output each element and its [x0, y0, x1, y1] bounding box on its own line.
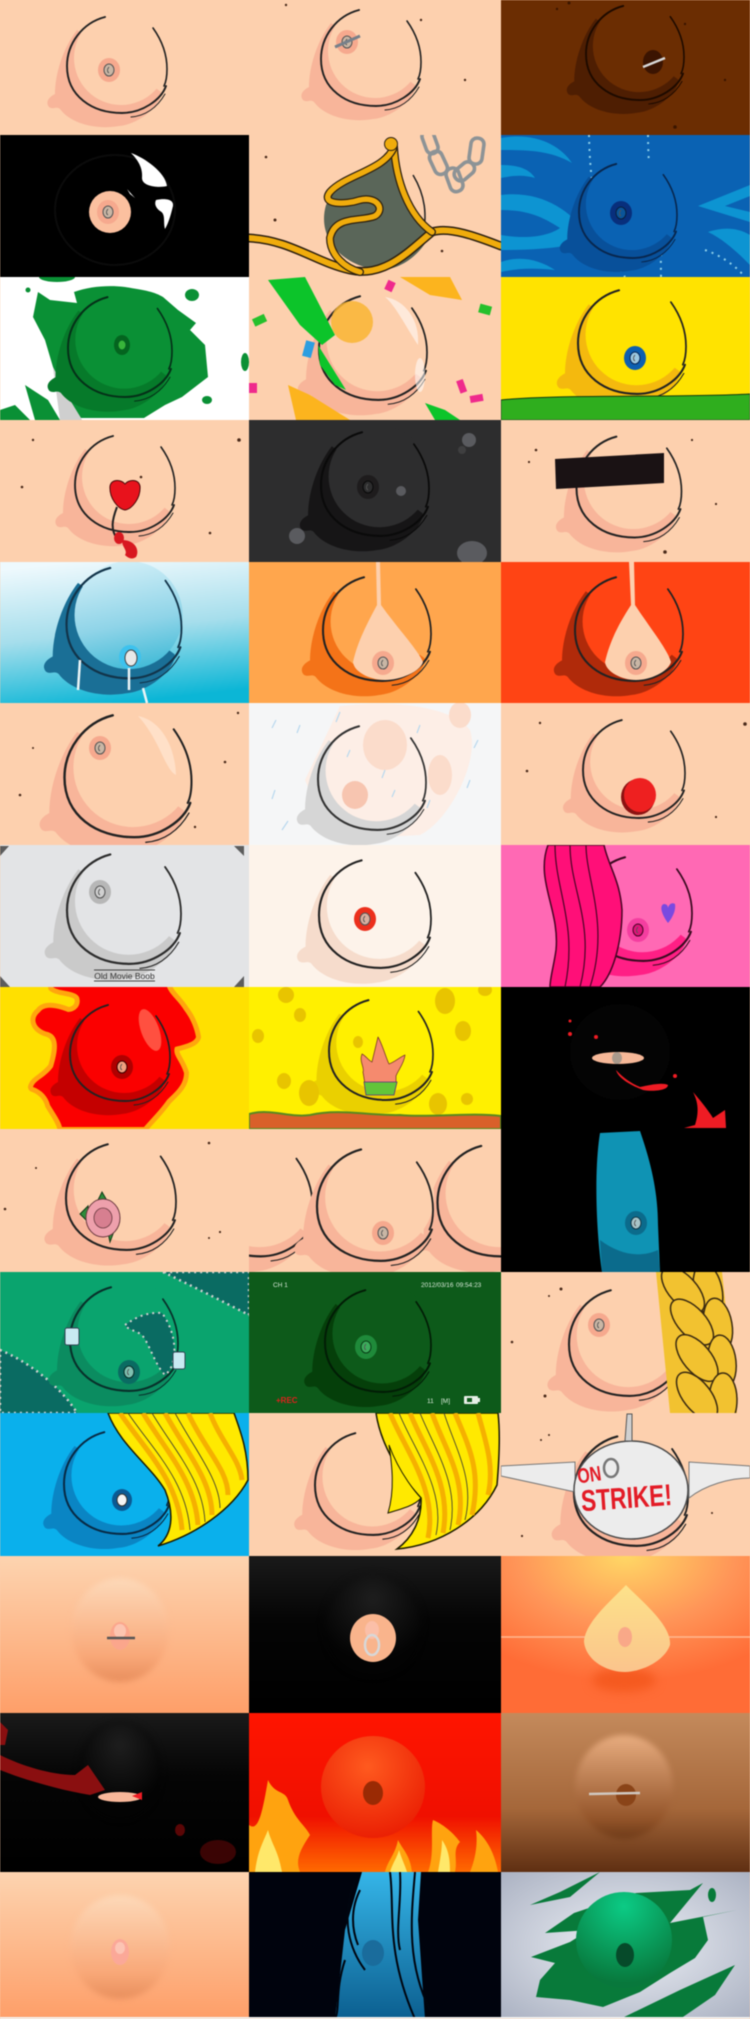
panel: torn green on paper [501, 1872, 750, 2019]
figure [294, 1427, 422, 1550]
figure [48, 291, 173, 412]
detail [616, 1943, 634, 1967]
panel: black with blue band [500, 1128, 750, 1273]
cord with charm [113, 507, 137, 558]
flame pattern [501, 137, 750, 272]
light beam [605, 562, 671, 680]
camera overlay: +REC [276, 1396, 298, 1405]
detail [625, 651, 647, 675]
strike lettering: STRIKE! [580, 1479, 673, 1518]
chain [420, 129, 485, 193]
dark detail [357, 475, 379, 499]
starfish character [361, 1037, 405, 1095]
rose tattoo [80, 1192, 120, 1242]
center figure [294, 1143, 434, 1277]
panel: soft peach with bar [0, 1578, 250, 1714]
blue band [596, 1131, 660, 1272]
detail [89, 736, 111, 760]
dark form [78, 1720, 162, 1820]
panel: cream [248, 844, 502, 988]
washed shape [305, 704, 472, 840]
panel: night vision [248, 1271, 502, 1414]
detail [98, 58, 120, 82]
figure [563, 714, 686, 832]
braid [654, 1260, 739, 1427]
figure [556, 430, 683, 552]
specks [4, 1142, 221, 1239]
green splats [0, 272, 249, 420]
caption: Old Movie Boob [94, 971, 155, 981]
detail [114, 335, 130, 355]
blonde hair [376, 1413, 499, 1549]
specks [521, 1434, 713, 1537]
drop form [584, 1585, 670, 1672]
stitched patch [125, 1313, 174, 1375]
battery [464, 1396, 480, 1404]
blue body [335, 1872, 425, 2019]
grey shape [324, 150, 432, 270]
flame core [255, 1830, 450, 1872]
panel: black with wet hair [249, 1872, 501, 2019]
left figure [175, 1139, 314, 1273]
figure [304, 1284, 432, 1407]
teal patches [0, 1272, 249, 1413]
detail [589, 1784, 640, 1806]
outline [413, 175, 425, 240]
panel: blue tribal [500, 134, 750, 278]
panel: black with ring [248, 1555, 502, 1714]
panel: black with highlights [0, 134, 250, 278]
exposed oval [89, 191, 131, 233]
panel: peach with gold band and chain [248, 134, 502, 277]
slit [98, 1792, 142, 1802]
floor line [501, 1636, 750, 1638]
figure [40, 708, 193, 855]
panel: yellow and green [500, 276, 750, 421]
panel: peach with rose [3, 1141, 222, 1266]
panel: pale washed with snow [248, 702, 502, 846]
panel: brown with bar [500, 1712, 750, 1873]
green form [576, 1892, 672, 1988]
faint outline [570, 1004, 670, 1100]
lower shade [600, 1240, 660, 1272]
panel: yellow sponge [248, 986, 502, 1130]
blood streak [0, 1722, 236, 1864]
ground [249, 1112, 501, 1129]
hook [625, 1414, 632, 1441]
highlight [138, 716, 176, 775]
panel: red with flames [248, 1712, 502, 1873]
flames [249, 1780, 498, 1872]
sponge holes [252, 984, 492, 1115]
figure [50, 999, 171, 1115]
red form [321, 1736, 425, 1838]
heart [661, 903, 675, 923]
panel: red-orange spotlight [500, 561, 750, 704]
figure [44, 561, 183, 695]
gleam [134, 1006, 166, 1054]
panel: black with blood slit [0, 1712, 250, 1873]
blood [568, 1020, 726, 1128]
figure [297, 854, 432, 984]
specks [556, 2, 726, 129]
figure [45, 848, 182, 980]
panel: brown [500, 0, 750, 136]
detail [372, 651, 394, 675]
dark form [323, 1573, 423, 1677]
detail with bar [643, 50, 665, 74]
specks [285, 4, 466, 81]
figure [554, 571, 684, 696]
detail with bar [335, 30, 360, 54]
panel: glowing orange [500, 1556, 750, 1714]
figure [560, 158, 678, 272]
detail [618, 1627, 632, 1647]
rocks [289, 433, 487, 565]
detail [111, 1055, 133, 1079]
strike lettering [576, 1462, 673, 1518]
flame [33, 987, 196, 1127]
figure [301, 4, 422, 120]
figure [47, 11, 168, 127]
flame rim [33, 987, 196, 1127]
panel: peach with bar piercing [284, 3, 467, 120]
camera overlay: 11 [427, 1398, 434, 1405]
pink hair [544, 845, 622, 987]
detail [362, 1940, 384, 1966]
figure [297, 720, 427, 845]
panel: three figures [248, 1144, 502, 1272]
soft form [575, 1735, 673, 1839]
figure [302, 571, 432, 696]
panel: icy blue [0, 562, 250, 704]
specks [19, 712, 239, 828]
strike lettering: ON [576, 1462, 603, 1488]
detail [107, 1622, 135, 1650]
detail ring [604, 1459, 618, 1477]
figure [298, 290, 428, 415]
panel: dark grey rock [248, 419, 502, 563]
green brush [268, 277, 346, 390]
figure [309, 994, 434, 1115]
camera overlay: 09:54:23 [456, 1282, 482, 1289]
figure [55, 430, 176, 546]
detail [118, 1360, 140, 1384]
light beam [353, 562, 423, 680]
red detail [354, 907, 376, 931]
detail [119, 645, 141, 669]
stains [342, 702, 471, 809]
figure [552, 1430, 689, 1562]
camera overlay: CH 1 [273, 1282, 288, 1289]
specks [526, 722, 747, 818]
panel: censor bar [527, 434, 718, 554]
camera overlay: [M] [441, 1398, 450, 1405]
glow shadow [592, 1668, 656, 1692]
panel: peach with braid [510, 1271, 738, 1414]
highlights [127, 153, 173, 229]
snow ticks [272, 712, 478, 830]
figure [49, 1281, 179, 1406]
red button [621, 778, 656, 815]
bottom edge [0, 2017, 750, 2019]
panel: red heart charm [20, 434, 242, 560]
panel: torn green on white [0, 276, 250, 421]
panel: soft peach [0, 1892, 250, 2018]
figure [547, 1284, 680, 1412]
panel: fire on yellow [0, 986, 250, 1130]
red heart [110, 480, 140, 510]
figure [563, 851, 693, 976]
panel: peach with paint and confetti [248, 276, 493, 421]
blue detail [624, 346, 646, 370]
detail [625, 1211, 647, 1235]
spotted area [331, 301, 373, 343]
detail [363, 1781, 383, 1805]
panel: old movie [0, 844, 250, 988]
white cover [574, 1441, 688, 1539]
green detail [355, 1335, 377, 1359]
grey patch [53, 367, 82, 420]
figure [300, 426, 430, 551]
green ground [501, 394, 750, 420]
soft form [71, 1578, 169, 1682]
panel: cyan with blonde hair [0, 1412, 250, 1557]
specks [511, 1288, 562, 1398]
faint outline [55, 155, 175, 265]
specks [265, 129, 443, 252]
figure [44, 1138, 177, 1266]
film corners [0, 846, 244, 987]
right figure [415, 1139, 554, 1273]
slit [592, 1052, 644, 1064]
soft form [70, 1895, 170, 1999]
green corner [425, 403, 460, 420]
detail [111, 1939, 129, 1965]
figure [557, 284, 687, 409]
panel: red button [525, 718, 748, 833]
specks [21, 438, 241, 534]
bolts [65, 1328, 185, 1369]
highlights [385, 297, 425, 392]
panel: black with blood [500, 986, 750, 1130]
hair strands [335, 1872, 430, 2019]
figure [43, 1426, 171, 1549]
blonde hair [108, 1413, 248, 1546]
detail [112, 1489, 132, 1511]
panel: peach with blonde hair [294, 1412, 501, 1551]
panel: on strike [500, 1412, 750, 1556]
censor bar [555, 453, 664, 489]
detail [588, 1313, 610, 1337]
panel: stitched green [0, 1271, 250, 1414]
panel: large peach [18, 711, 240, 846]
panel: plain peach [47, 15, 169, 128]
gold band [249, 138, 501, 272]
camera overlay: 2012/03/16 [421, 1282, 454, 1289]
panel: pink hair [500, 844, 750, 988]
camera overlay [273, 1282, 482, 1405]
specks [528, 439, 717, 554]
drips [78, 660, 147, 703]
dark detail [610, 201, 632, 225]
detail [372, 1221, 394, 1245]
orange brush [288, 277, 462, 420]
detail [627, 918, 649, 942]
confetti [249, 280, 492, 403]
grey detail [89, 880, 111, 904]
ring [365, 1621, 379, 1655]
torn green [530, 1872, 737, 2019]
bare oval [350, 1614, 396, 1662]
panel: orange spotlight [248, 562, 502, 704]
dotted lines [589, 135, 745, 277]
torn green [33, 286, 208, 418]
figure [567, 0, 685, 114]
straps [501, 1462, 750, 1498]
